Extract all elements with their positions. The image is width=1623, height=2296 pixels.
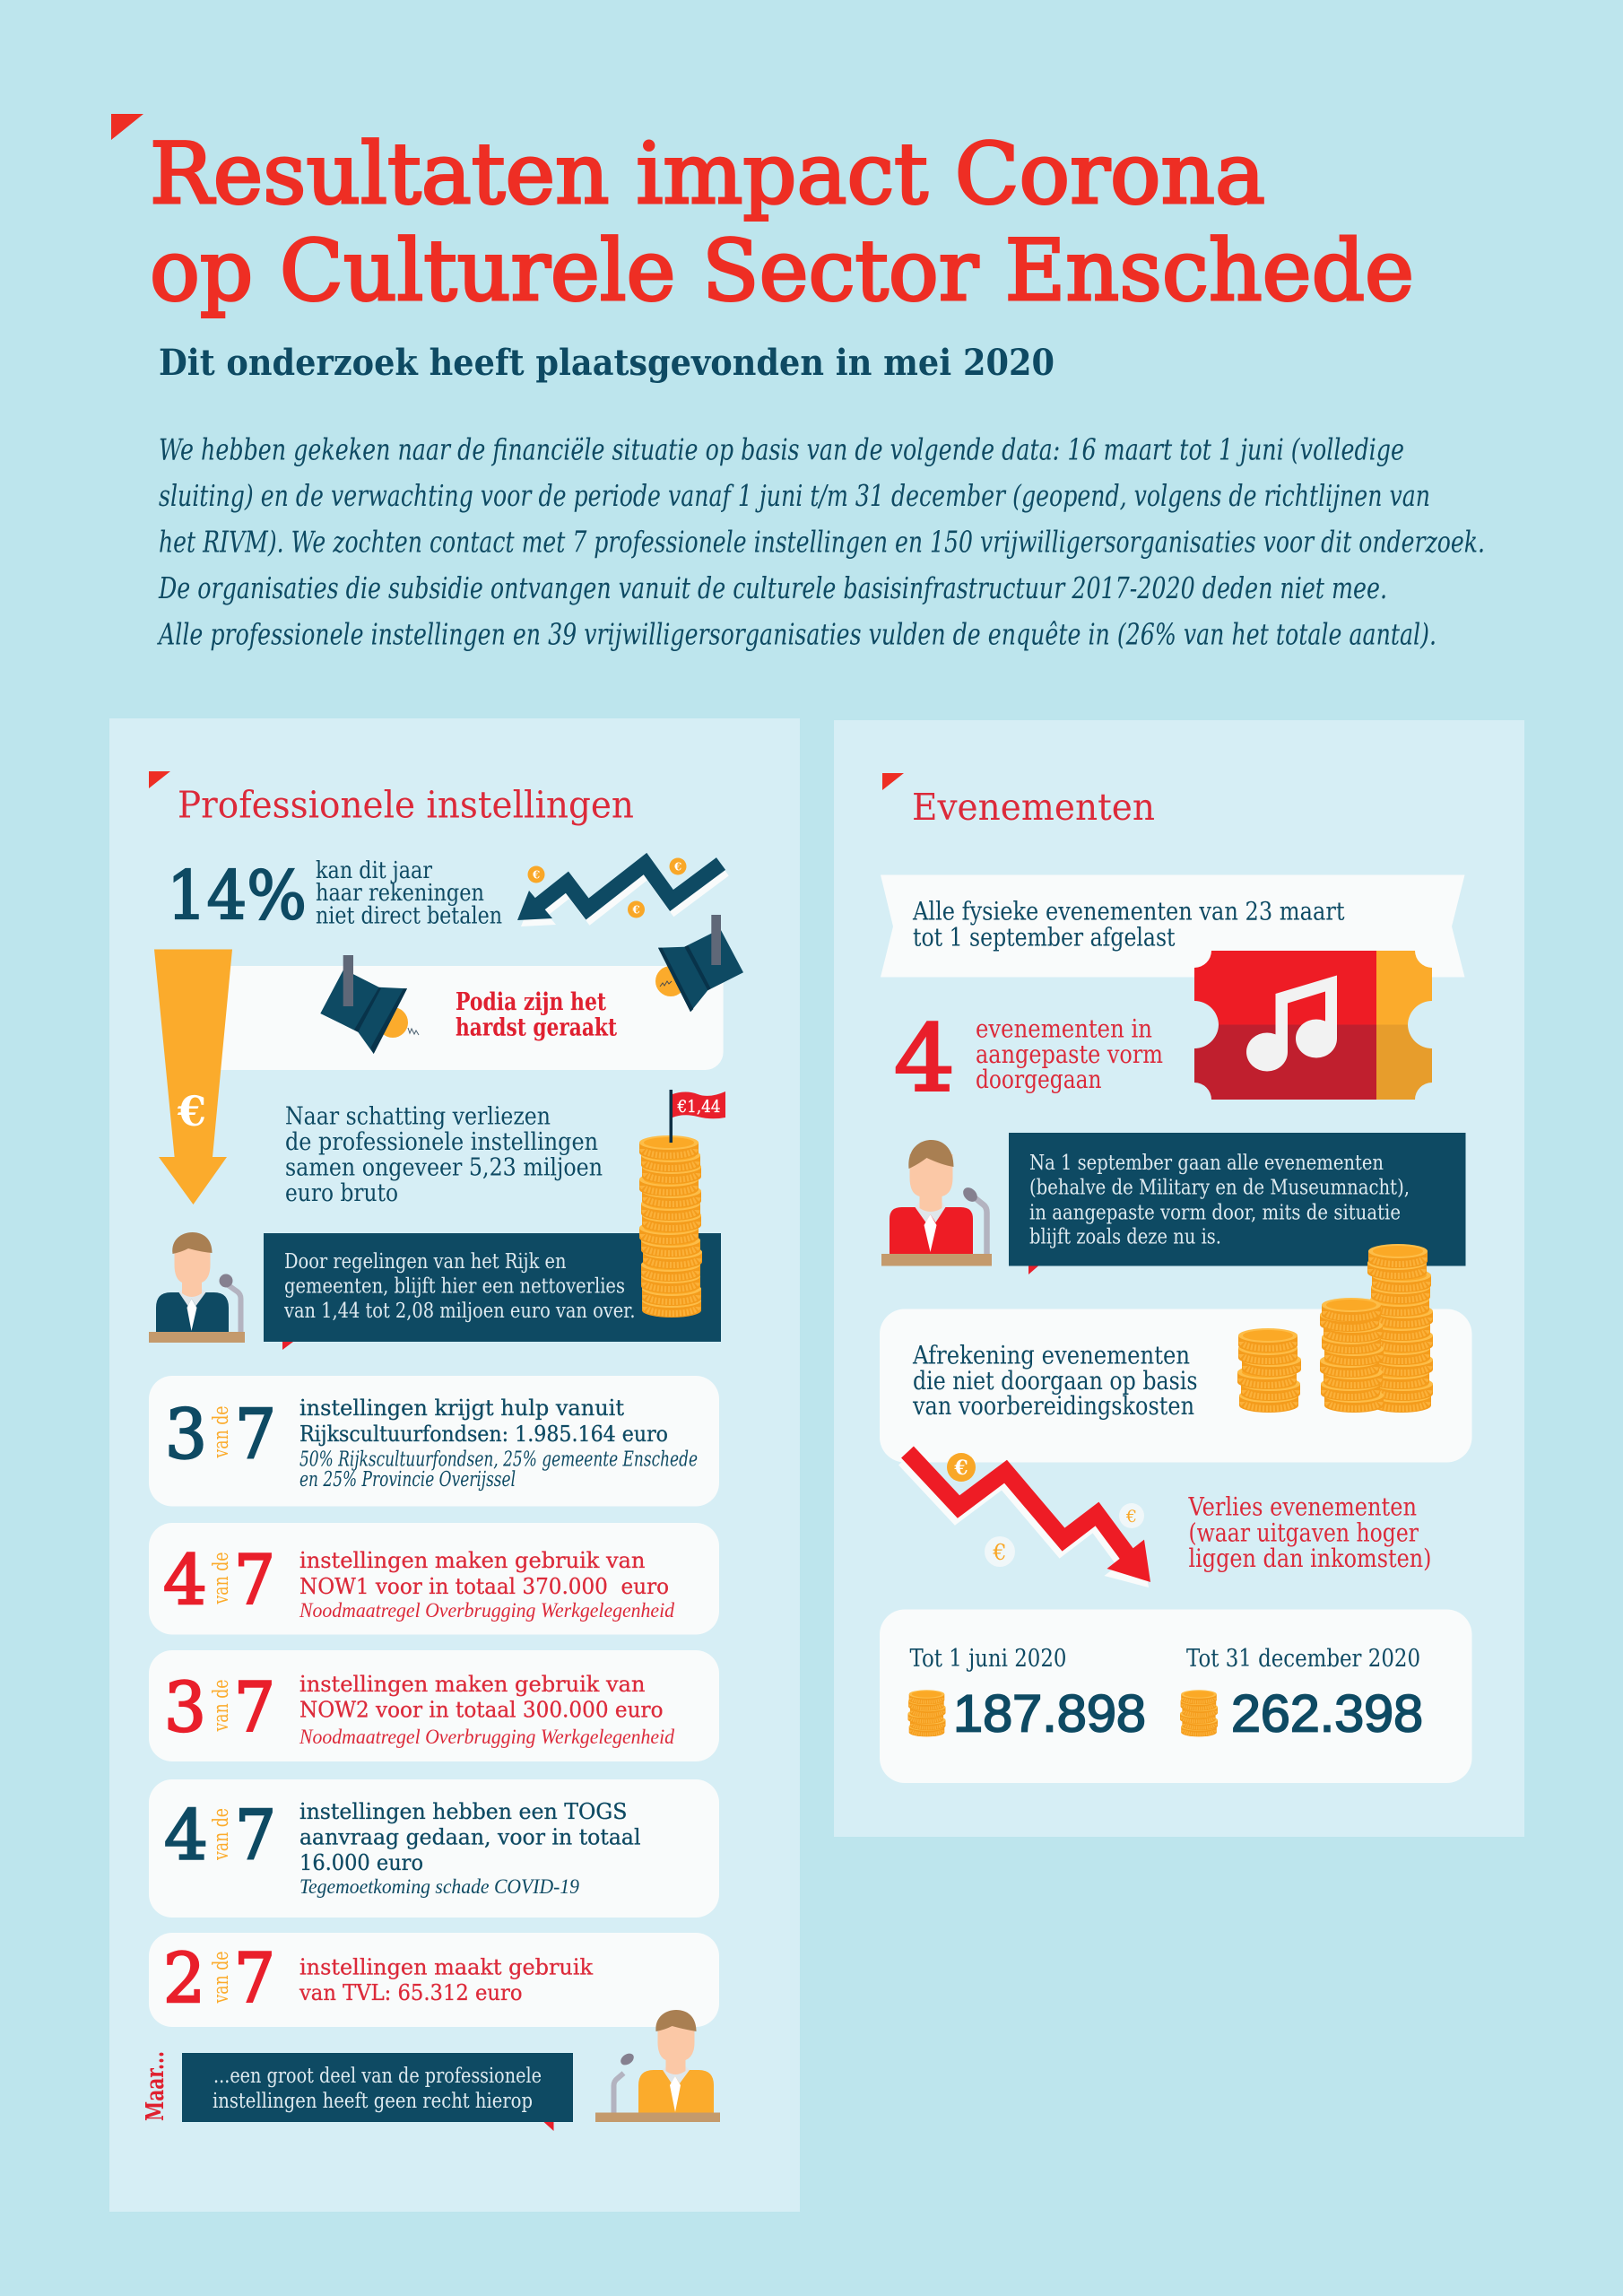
text: rekeningen (316, 857, 502, 929)
stat: 14 percent: 14% (167, 857, 307, 935)
heading: evenementen: Evenementen (912, 786, 1155, 829)
text: aangepaste vorm: doorgegaan (976, 1065, 1101, 1094)
card: rijkscultuurfondsen (149, 1376, 719, 1507)
subtitle: Dit onderzoek heeft plaatsgevonden in mei 2020 (159, 342, 1055, 384)
card: TVL: van TVL: 65.312 euro (299, 1979, 522, 2005)
heading: professionele instellingen: Professionele instellingen (178, 784, 634, 827)
text: naar schatting: samen ongeveer 5,23 miljoen (285, 1153, 603, 1182)
card: TVL (149, 1933, 719, 2027)
card: TVL: 7 (234, 1938, 275, 2018)
card: NOW1: NOW1 voor in totaal 370.000 euro (299, 1573, 669, 1599)
arrow: orange euro (154, 949, 232, 1205)
card: rijkscultuurfondsen: en 25% Provincie Overijssel (299, 1468, 516, 1492)
title: op Culturele Sector Enschede (150, 222, 1414, 320)
icon: falling red arrow with coins: € (1125, 1507, 1137, 1526)
stat: 4 evenementen: 4 (894, 1006, 955, 1112)
text: afgelast (912, 897, 1345, 952)
card: NOW2: Noodmaatregel Overbrugging Werkgelegenheid (299, 1726, 674, 1748)
text: tot 31 december: Tot 31 december 2020 (1186, 1645, 1420, 1673)
title block (111, 114, 1414, 320)
title: Resultaten impact Corona (150, 126, 1265, 223)
card: TVL: 2 (163, 1938, 205, 2018)
title (150, 126, 1414, 320)
card: NOW2: van de (210, 1680, 233, 1732)
card: TOGS: van de (210, 1808, 233, 1861)
text: afrekening: van voorbereidingskosten (912, 1391, 1194, 1421)
icon: title corner triangle (111, 114, 143, 140)
callout: na 1 september: (behalve de Military en de Museumnacht), (1029, 1175, 1410, 1200)
card: TOGS: aanvraag gedaan, voor in totaal (299, 1824, 641, 1849)
panel: professionele instellingen (109, 718, 800, 2212)
card: TOGS: 4 (164, 1796, 208, 1874)
card: NOW1: 7 (234, 1540, 275, 1620)
icon: coins small right (1180, 1690, 1218, 1736)
icon: spotlight left (320, 955, 419, 1054)
icon: falling red arrow with coins: € (992, 1540, 1007, 1565)
callout: na 1 september: blijft zoals deze nu is. (1029, 1223, 1221, 1248)
card: rijkscultuurfondsen: 50% Rijkscultuurfondsen, 25% gemeente Enschede (299, 1448, 698, 1471)
card: NOW1: Noodmaatregel Overbrugging Werkgelegenheid (299, 1599, 674, 1622)
callout: na 1 september (1009, 1133, 1465, 1274)
card: NOW1: 4 (163, 1540, 207, 1620)
text: naar schatting: Naar schatting verliezen (285, 1101, 551, 1130)
text: afrekening: die niet doorgaan op basis (913, 1366, 1198, 1396)
intro paragraph (157, 432, 1485, 651)
callout: nettoverlies (264, 1233, 721, 1350)
text: podia (456, 988, 617, 1042)
icon: coin stacks (1237, 1244, 1433, 1413)
card: TVL: instellingen maakt gebruik (299, 1953, 594, 1980)
card: NOW2: 7 (234, 1667, 275, 1747)
icon: falling red arrow with coins: € (953, 1457, 968, 1480)
icon: coin stack with flag (639, 1090, 725, 1318)
card: TOGS (149, 1779, 719, 1918)
callout: geen recht: instellingen heeft geen recht hierop (213, 2090, 533, 2113)
text: aangepaste vorm: aangepaste vorm (976, 1039, 1163, 1069)
icon: falling navy arrow with coins: € (532, 868, 540, 881)
callout: nettoverlies: Door regelingen van het Rijk en (284, 1248, 567, 1274)
text: naar schatting: euro bruto (285, 1178, 398, 1207)
icon: spotlight right (655, 915, 743, 1012)
text: podia: Podia zijn het (456, 988, 606, 1016)
card: TVL: van de (210, 1952, 233, 2004)
icon: coin stack with flag: €1,44 (677, 1097, 721, 1117)
icon: coins small left (907, 1690, 945, 1736)
icon: section triangle (882, 773, 904, 790)
card: NOW1: van de (210, 1552, 233, 1605)
card: rijkscultuurfondsen: Rijkscultuurfondsen: 1.985.164 euro (299, 1421, 668, 1447)
card: rijkscultuurfondsen: van de (210, 1406, 233, 1458)
callout: geen recht: ...een groot deel van de professionele (213, 2065, 542, 2088)
text: verlies evenementen (1188, 1492, 1431, 1573)
card: TOGS: instellingen hebben een TOGS (299, 1798, 628, 1824)
icon: speaker navy (149, 1232, 245, 1343)
text: naar schatting: de professionele instellingen (285, 1127, 598, 1156)
icon: speaker orange (595, 2010, 720, 2122)
callout: geen recht (182, 2053, 573, 2131)
card: NOW2: instellingen maken gebruik van (299, 1671, 646, 1697)
card: TOGS: 7 (235, 1796, 276, 1874)
text: verlies evenementen: liggen dan inkomsten) (1189, 1544, 1431, 1573)
icon: falling red arrow with coins (905, 1452, 1150, 1587)
text: verlies evenementen: (waar uitgaven hoger (1189, 1518, 1419, 1548)
icon: section triangle (149, 771, 170, 788)
text: rekeningen: kan dit jaar (316, 857, 432, 884)
text: afgelast: tot 1 september afgelast (913, 922, 1176, 952)
text: rekeningen: niet direct betalen (316, 902, 502, 929)
card: NOW1: instellingen maken gebruik van (299, 1547, 646, 1573)
stat: 187.898: 187.898 (953, 1684, 1146, 1744)
icon: falling navy arrow with coins: € (673, 861, 681, 874)
ribbon: afgelast (881, 875, 1465, 978)
stat: 262.398: 262.398 (1231, 1684, 1423, 1744)
callout: na 1 september: Na 1 september gaan alle evenementen (1029, 1150, 1384, 1175)
text: tot 1 juni: Tot 1 juni 2020 (909, 1645, 1067, 1673)
card: TOGS: Tegemoetkoming schade COVID-19 (299, 1875, 579, 1898)
card: NOW2: NOW2 voor in totaal 300.000 euro (299, 1697, 664, 1722)
callout: na 1 september: in aangepaste vorm door, mits de situatie (1029, 1200, 1401, 1225)
text: afrekening (912, 1340, 1198, 1421)
text: verlies evenementen: Verlies evenementen (1188, 1492, 1417, 1521)
panel: evenementen (834, 720, 1524, 1837)
card: rijkscultuurfondsen: 3 (165, 1394, 207, 1474)
icon: falling navy arrow with coins: € (631, 904, 640, 917)
card: verliesbedragen (880, 1609, 1472, 1783)
card: rijkscultuurfondsen: instellingen krijgt hulp vanuit (299, 1395, 624, 1421)
text: afrekening: Afrekening evenementen (912, 1340, 1190, 1370)
card: NOW1 (149, 1523, 719, 1634)
card: TOGS: 16.000 euro (299, 1849, 423, 1875)
text: rekeningen: haar rekeningen (316, 880, 484, 907)
text: maar: Maar... (142, 2051, 169, 2121)
text: aangepaste vorm: evenementen in (976, 1013, 1152, 1044)
card: NOW2: 3 (164, 1667, 206, 1747)
card: afrekening (880, 1309, 1472, 1462)
card: NOW2 (149, 1650, 719, 1761)
text: naar schatting (285, 1101, 603, 1207)
icon: music ticket (1194, 951, 1432, 1100)
band: podia (215, 966, 724, 1070)
arrow: orange euro: € (177, 1087, 206, 1135)
text: afgelast: Alle fysieke evenementen van 23 maart (912, 897, 1345, 926)
icon: speaker red (881, 1140, 992, 1266)
callout: nettoverlies: gemeenten, blijft hier een nettoverlies (284, 1274, 625, 1299)
callout: nettoverlies: van 1,44 tot 2,08 miljoen euro van over. (283, 1298, 635, 1323)
text: podia: hardst geraakt (456, 1013, 617, 1042)
text: aangepaste vorm (976, 1013, 1163, 1094)
icon: falling navy arrow with coins (517, 857, 725, 926)
card: rijkscultuurfondsen: 7 (235, 1394, 276, 1474)
